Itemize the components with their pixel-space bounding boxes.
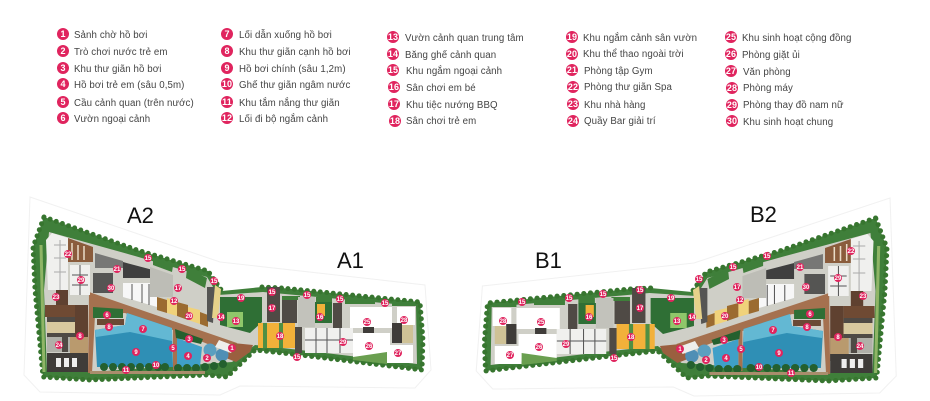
number markers: A side: 15 (145, 256, 152, 262)
number markers: B side: 17 (637, 306, 644, 312)
number markers: B side: 15 (566, 296, 573, 302)
legend: amenities 25-30: 30 (727, 116, 737, 126)
legend: amenities 25-30: 28 (727, 83, 737, 93)
number markers: B side: 8 (805, 325, 809, 331)
number markers: B side: 17 (734, 285, 741, 291)
legend: amenities 25-30 (725, 31, 852, 128)
number markers: A side: 29 (340, 340, 347, 346)
legend: amenities 19-24: Khu ngắm cảnh sân vườn (583, 33, 697, 44)
legend: amenities 19-24: Phòng thư giãn Spa (584, 82, 673, 93)
legend: amenities 1-6: Sảnh chờ hồ bơi (74, 30, 147, 41)
legend: amenities 7-12: Lối dẫn xuống hồ bơi (239, 30, 332, 41)
legend: amenities 1-6 (57, 28, 194, 125)
legend: amenities 1-6: Cầu cảnh quan (trên nước) (74, 98, 194, 109)
legend: amenities 19-24: 24 (568, 116, 578, 126)
legend: amenities 13-18: Băng ghế cảnh quan (405, 50, 496, 61)
heading: B2: B2 (750, 202, 777, 227)
legend: amenities 13-18: Sân chơi trẻ em (406, 116, 476, 127)
number markers: B side: 23 (860, 294, 867, 300)
legend: amenities 25-30: Phòng máy (743, 83, 793, 94)
number markers: A side: 20 (186, 314, 193, 320)
legend: amenities 1-6: 5 (60, 97, 66, 107)
legend: amenities 25-30: 26 (726, 49, 736, 59)
number markers: B side: 29 (835, 276, 842, 282)
legend: amenities 19-24: 22 (568, 82, 578, 92)
number markers: A side: 29 (78, 278, 85, 284)
number markers: B side: 20 (722, 314, 729, 320)
legend: amenities 7-12: Hồ bơi chính (sâu 1,2m) (239, 64, 346, 75)
number markers: A side: 14 (218, 315, 225, 321)
legend: amenities 7-12: Khu thư giãn cạnh hồ bơi (239, 47, 351, 58)
legend: amenities 1-6: Trò chơi nước trẻ em (74, 47, 168, 58)
number markers: B side: 29 (563, 342, 570, 348)
legend: amenities 1-6: 3 (60, 63, 66, 73)
legend: amenities 7-12: 9 (224, 63, 230, 73)
number markers: A side: 21 (114, 267, 121, 273)
number markers: A side: 22 (65, 252, 72, 258)
legend: amenities 25-30: Phòng giặt ủi (742, 50, 800, 61)
legend: amenities 13-18: 18 (390, 116, 400, 126)
number markers: B side: 15 (696, 277, 703, 283)
number markers: B side: 18 (628, 335, 635, 341)
number markers: A side: 7 (141, 327, 145, 333)
legend: amenities 13-18: 17 (389, 99, 399, 109)
number markers: A side: 18 (277, 334, 284, 340)
number markers: B side: 25 (538, 320, 545, 326)
number markers: B side: 15 (600, 292, 607, 298)
number markers: B side: 14 (689, 315, 696, 321)
legend: amenities 25-30: Khu sinh hoạt chung (743, 117, 833, 128)
number markers: A side: 24 (56, 343, 63, 349)
legend: amenities 13-18: 14 (388, 49, 398, 59)
legend: amenities 13-18: 13 (388, 32, 398, 42)
legend: amenities 25-30: Văn phòng (743, 67, 791, 78)
legend: amenities 13-18: Sân chơi em bé (406, 83, 476, 94)
heading: A2: A2 (127, 203, 154, 228)
legend: amenities 1-6: Khu thư giãn hồ bơi (74, 64, 161, 75)
number markers: B side: 4 (724, 356, 728, 362)
number markers: A side: 17 (175, 286, 182, 292)
number markers: B side: 19 (668, 296, 675, 302)
legend: amenities 19-24: Phòng tập Gym (584, 66, 653, 77)
number markers: B side: 13 (674, 319, 681, 325)
number markers: A side: 8 (78, 334, 82, 340)
legend: amenities 7-12 (221, 28, 351, 125)
number markers: B side: 21 (797, 265, 804, 271)
number markers: A side: 15 (269, 290, 276, 296)
legend: amenities 7-12: Khu tắm nắng thư giãn (239, 98, 340, 109)
legend: amenities 25-30: Phòng thay đồ nam nữ (743, 100, 844, 111)
number markers: B side: 12 (737, 298, 744, 304)
number markers: B side: 15 (637, 288, 644, 294)
legend: amenities 25-30: Khu sinh hoạt cộng đồng (742, 33, 852, 44)
legend: amenities 1-6: 6 (60, 113, 66, 123)
legend: amenities 19-24 (566, 31, 697, 127)
number markers: A side: 15 (294, 355, 301, 361)
number markers: A side: 10 (153, 363, 160, 369)
number markers: B side: 26 (536, 345, 543, 351)
number markers: A side: 6 (105, 313, 109, 319)
number markers: A side: 17 (269, 306, 276, 312)
number markers: B side: 7 (771, 328, 775, 334)
number markers: A side: 19 (238, 296, 245, 302)
legend: amenities 13-18: Khu tiệc nướng BBQ (406, 100, 498, 111)
legend: amenities 19-24: 20 (567, 49, 577, 59)
legend: amenities 19-24: Khu nhà hàng (584, 100, 646, 111)
number markers: A side: 25 (364, 320, 371, 326)
legend: amenities 1-6: 4 (60, 79, 66, 89)
legend: amenities 19-24: 19 (567, 32, 577, 42)
number markers: A side: 4 (186, 354, 190, 360)
number markers: A side: 30 (108, 286, 115, 292)
legend: amenities 25-30: 29 (727, 100, 737, 110)
legend: amenities 13-18: 16 (389, 82, 399, 92)
legend: amenities 13-18: 15 (388, 65, 398, 75)
legend: amenities 7-12: Lối đi bộ ngắm cảnh (239, 114, 328, 125)
legend: amenities 7-12: Ghế thư giãn ngâm nước (239, 80, 351, 91)
legend: amenities 1-6: 2 (60, 46, 66, 56)
number markers: B side: 10 (756, 365, 763, 371)
number markers: B side (499, 247, 867, 377)
number markers: B side: 6 (808, 312, 812, 318)
legend: amenities 19-24: 23 (568, 99, 578, 109)
site plan: towers A1 and A2 (24, 197, 431, 395)
number markers: A side: 27 (395, 351, 402, 357)
number markers: A side (52, 250, 408, 374)
legend: amenities 25-30: 25 (726, 32, 736, 42)
number markers: B side: 30 (803, 285, 810, 291)
number markers: B side: 15 (519, 300, 526, 306)
legend: amenities 1-6: 1 (60, 29, 66, 39)
number markers: B side: 15 (764, 254, 771, 260)
number markers: A side: 15 (304, 293, 311, 299)
number markers: B side: 1 (678, 347, 682, 353)
number markers: B side: 11 (788, 371, 795, 377)
number markers: A side: 12 (171, 299, 178, 305)
number markers: B side: 27 (507, 353, 514, 359)
legend: amenities 19-24: Khu thể thao ngoài trời (583, 49, 684, 60)
number markers: B side: 15 (611, 356, 618, 362)
number markers: B side: 5 (739, 347, 743, 353)
number markers: B side: 3 (722, 338, 726, 344)
legend: amenities 13-18 (387, 31, 524, 127)
number markers: B side: 8 (836, 335, 840, 341)
legend: amenities 1-6: Hồ bơi trẻ em (sâu 0,5m) (74, 80, 185, 91)
number markers: A side: 13 (233, 319, 240, 325)
number markers: A side: 1 (230, 346, 234, 352)
legend: amenities 1-6: Vườn ngoại cảnh (74, 114, 150, 125)
number markers: A side: 15 (382, 301, 389, 307)
number markers: A side: 28 (401, 318, 408, 324)
number markers: A side: 8 (107, 325, 111, 331)
number markers: B side: 28 (500, 319, 507, 325)
number markers: A side: 11 (123, 368, 130, 374)
legend: amenities 19-24: 21 (567, 65, 577, 75)
number markers: A side: 23 (53, 295, 60, 301)
number markers: A side: 3 (187, 337, 191, 343)
legend: amenities 7-12: 11 (222, 97, 232, 107)
number markers: A side: 15 (211, 279, 218, 285)
legend: amenities 25-30: 27 (726, 66, 736, 76)
legend: amenities 7-12: 10 (222, 79, 232, 89)
number markers: A side: 5 (171, 346, 175, 352)
number markers: A side: 15 (337, 297, 344, 303)
number markers: B side: 22 (848, 249, 855, 255)
number markers: B side: 15 (730, 265, 737, 271)
legend: amenities 7-12: 12 (222, 113, 232, 123)
legend: amenities 7-12: 8 (224, 46, 230, 56)
number markers: A side: 2 (205, 356, 209, 362)
number markers: B side: 9 (777, 351, 781, 357)
number markers: A side: 15 (179, 267, 186, 273)
legend: amenities 19-24: Quầy Bar giải trí (584, 116, 656, 127)
number markers: A side: 16 (317, 315, 324, 321)
number markers: B side: 2 (704, 358, 708, 364)
number markers: B side: 16 (586, 315, 593, 321)
number markers: A side: 9 (134, 350, 138, 356)
number markers: B side: 24 (857, 344, 864, 350)
heading: B1: B1 (535, 248, 562, 273)
legend: amenities 13-18: Khu ngắm ngoại cảnh (406, 66, 502, 77)
legend: amenities 7-12: 7 (224, 29, 230, 39)
legend: amenities 13-18: Vườn cảnh quan trung tâm (405, 33, 524, 44)
number markers: A side: 26 (366, 344, 373, 350)
site plan: towers B1 and B2 (476, 198, 896, 396)
heading: A1: A1 (337, 248, 364, 273)
